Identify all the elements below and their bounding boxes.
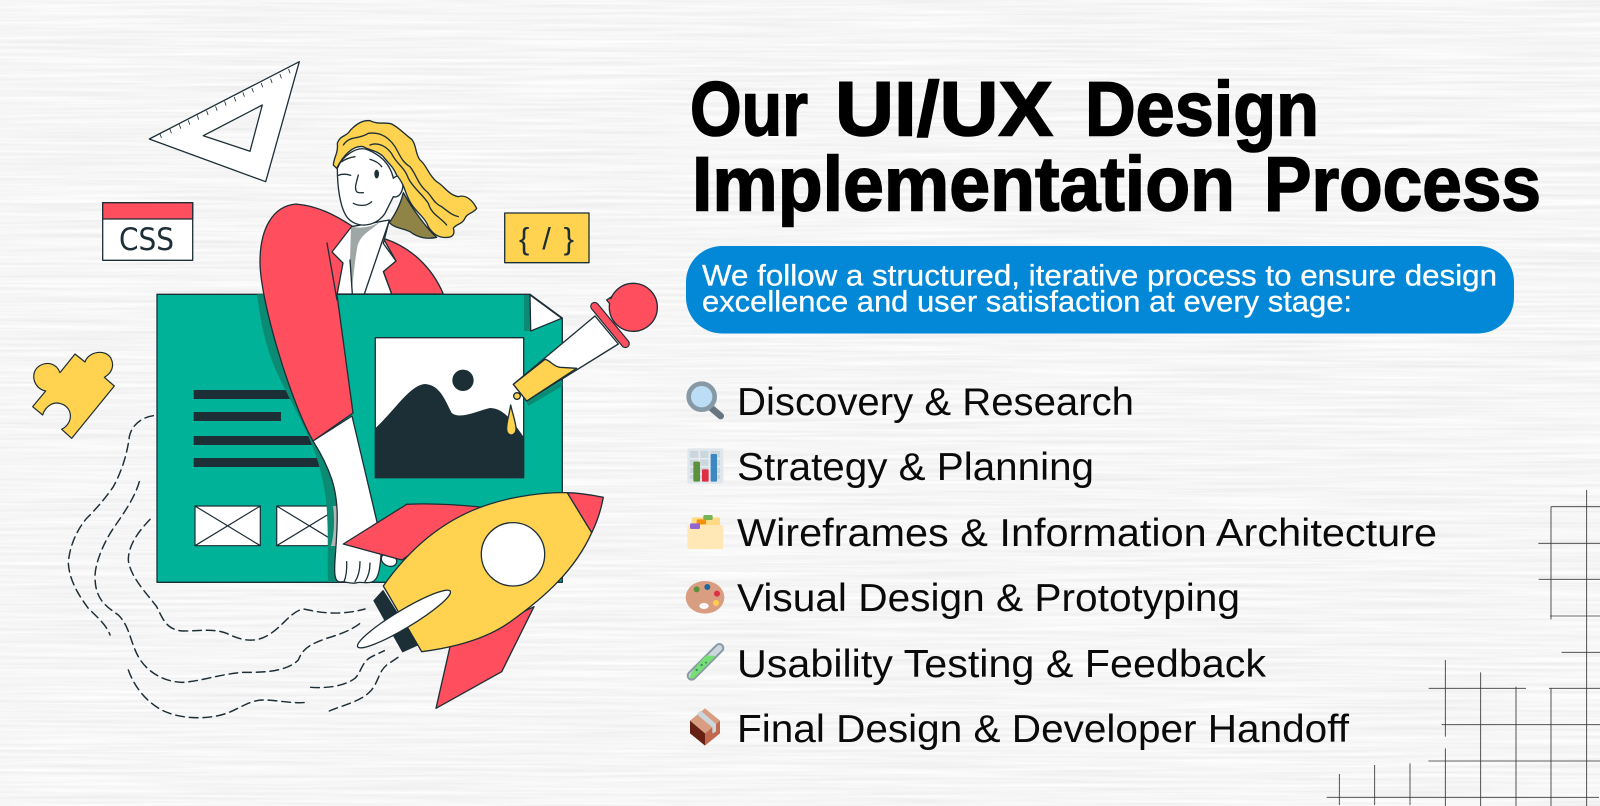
text lines placeholder — [194, 390, 329, 467]
figure: rocket — [343, 493, 603, 708]
title: Our — [690, 66, 808, 152]
picture card with mountains — [375, 338, 524, 478]
rocket upper fin — [343, 504, 480, 560]
step 2: strategy and planning: Strategy & Planning — [737, 446, 1094, 489]
icon: code tag: { / } — [519, 221, 574, 256]
step 6: final design and developer handoff: Final Design & Developer Handoff — [737, 708, 1349, 751]
icon: puzzle piece — [33, 352, 114, 438]
rocket nozzle — [374, 591, 417, 652]
step 5: usability testing and feedback: Usability Testing & Feedback — [737, 643, 1267, 686]
rocket nose — [567, 493, 603, 533]
step 4: visual design and prototyping: Visual Design & Prototyping — [737, 577, 1240, 620]
icon: CSS window: CSS — [119, 222, 174, 258]
figure: head and hair — [333, 121, 477, 238]
intro callout pill: excellence and user satisfaction at every stage: — [702, 286, 1352, 319]
icon: code tag — [505, 213, 589, 263]
icon: eyedropper with paint — [507, 283, 657, 435]
figure: hair back, jacket and shirt — [332, 193, 443, 294]
rocket centre fin — [353, 583, 455, 655]
figure: arm shadow — [257, 294, 342, 582]
illustration: designer with rocket — [33, 62, 657, 718]
intro callout pill: We follow a structured, iterative process to ensure design — [702, 260, 1497, 293]
dashed rocket trails — [68, 416, 400, 718]
rocket window — [481, 523, 545, 586]
title — [690, 66, 1541, 228]
decorative grid corner — [1327, 490, 1600, 806]
title: Process — [1264, 142, 1541, 228]
rocket lower fin — [436, 607, 534, 708]
icon: set square ruler — [149, 62, 299, 182]
icon: CSS window — [103, 203, 193, 260]
title: Design — [1085, 66, 1319, 152]
title: UI/UX — [835, 66, 1053, 152]
title: Implementation — [692, 142, 1235, 228]
figure: raised forearm and hand — [313, 416, 399, 583]
intro callout pill — [686, 246, 1514, 334]
step 3: wireframes and information architecture: Wireframes & Information Architecture — [737, 512, 1437, 555]
step 1: discovery and research: Discovery & Research — [737, 381, 1134, 424]
figure: red sleeve — [260, 204, 353, 441]
image wireframe boxes — [195, 506, 342, 546]
panel: green webpage mockup — [157, 294, 562, 582]
rocket body — [383, 493, 592, 652]
process list — [686, 381, 1437, 751]
